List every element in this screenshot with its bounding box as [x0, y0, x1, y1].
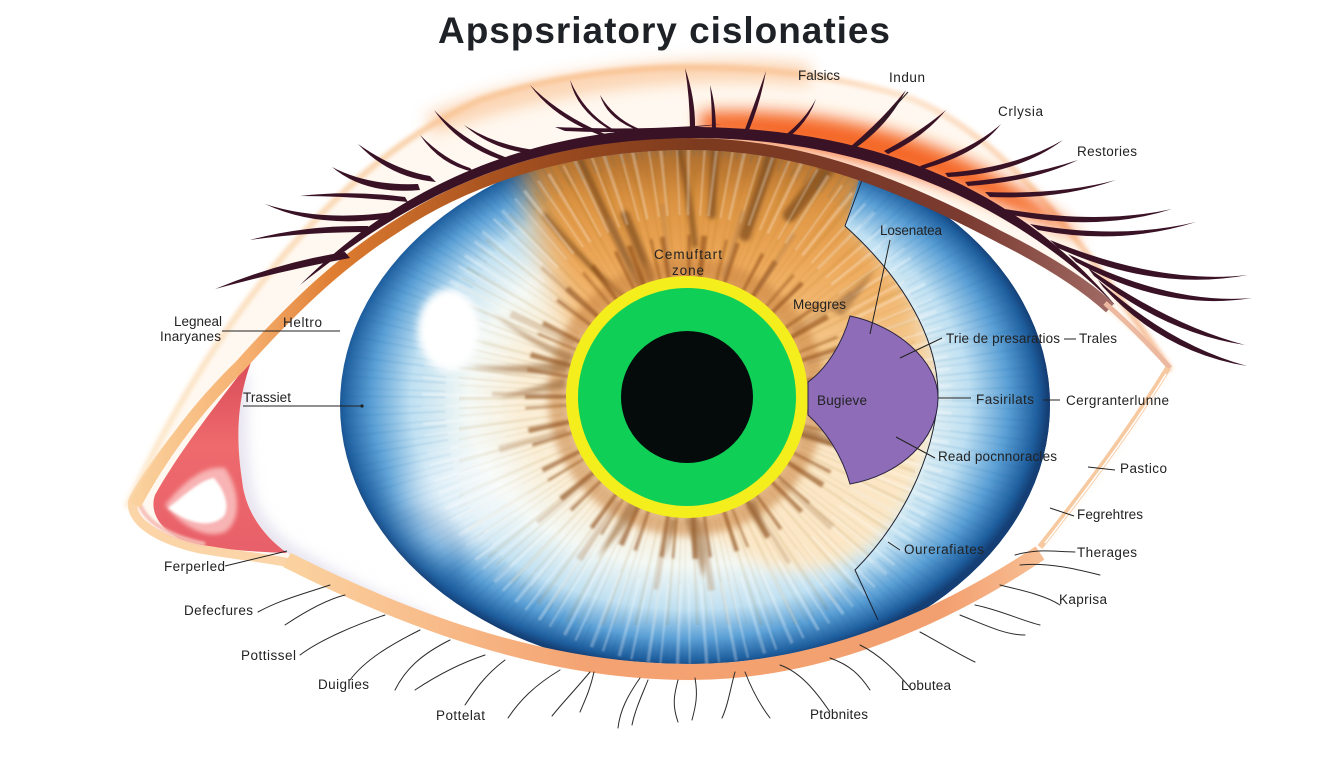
purple sector: [808, 316, 938, 484]
pupil: [621, 331, 753, 463]
labels: Pottelat: [436, 708, 485, 723]
leader lines: [222, 92, 1115, 566]
sclera: [237, 150, 1168, 664]
labels: Indun: [889, 70, 925, 85]
iris base gradient: [330, 130, 1060, 680]
upper eyelashes: [215, 68, 1252, 366]
brown halo around ring: [559, 269, 815, 525]
soft light patch lower left: [405, 450, 515, 550]
labels: Trassiet: [243, 390, 291, 405]
labels: Restories: [1077, 144, 1137, 159]
orange upper iris wedge: [504, 150, 937, 385]
labels: Defecfures: [184, 603, 253, 618]
white bottom fibres: [462, 175, 912, 625]
cream sector border: [845, 180, 938, 620]
labels: Fegrehtres: [1077, 507, 1143, 522]
iris: [340, 150, 1050, 664]
blue outer fibres: [374, 150, 1005, 653]
corner peach band: [132, 342, 305, 566]
labels: Ourerafiates: [904, 542, 984, 557]
labels: Ferperled: [164, 559, 225, 574]
labels: Ptobnites: [810, 707, 868, 722]
title: Apspsriatory cislonaties: [438, 10, 890, 51]
labels: Losenatea: [880, 223, 942, 238]
labels: Lobutea: [901, 678, 951, 693]
labels: Heltro: [283, 315, 322, 330]
lower dark blue blotch left: [400, 518, 457, 610]
lower lid: [287, 553, 1040, 672]
labels: Crlysia: [998, 104, 1043, 119]
labels: Legneal: [174, 314, 222, 329]
blue sector right of the boundary: [846, 180, 1050, 608]
orange glow above lid: [700, 111, 1085, 240]
upper lid dark line: [300, 127, 1115, 305]
labels: Pottissel: [241, 648, 296, 663]
labels: Falsics: [798, 68, 840, 83]
right lower lid inner highlight: [1045, 374, 1166, 543]
labels: Trales: [1079, 331, 1117, 346]
yellow ring: [566, 276, 808, 518]
sclera shading: [237, 372, 430, 625]
labels: [160, 68, 1169, 723]
labels: Fasirilats: [976, 392, 1034, 407]
inner corner pale line: [140, 505, 205, 544]
cream inner region on right: [716, 311, 937, 577]
labels: Kaprisa: [1059, 592, 1107, 607]
outer eyelid band: [127, 67, 1170, 507]
labels: Read pocnnoracles: [938, 449, 1057, 464]
labels: Duiglies: [318, 677, 369, 692]
labels: Therages: [1077, 545, 1137, 560]
fine orange fibres: [497, 207, 877, 587]
larger brown spikes: [467, 270, 880, 578]
right lower lid: [1040, 368, 1168, 547]
labels: Cemuftart: [654, 247, 722, 262]
labels: Meggres: [793, 297, 846, 312]
lower eyelashes: [258, 551, 1100, 728]
highlight on iris: [418, 289, 480, 371]
labels: Bugieve: [817, 393, 867, 408]
brown radial fibres: [527, 237, 847, 557]
lid tail to outer corner: [1105, 303, 1170, 368]
labels: zone: [672, 263, 704, 278]
green ring: [578, 288, 796, 506]
labels: Trie de presaratios: [946, 331, 1060, 346]
pupil rings: [566, 276, 808, 518]
skin area around the eye: [127, 67, 1170, 680]
dark streaks in orange wedge: [545, 150, 830, 300]
labels: Cergranterlunne: [1066, 393, 1169, 408]
upper lid brown band: [135, 144, 1110, 505]
leader end dot: [360, 404, 364, 408]
caruncle inner corner: [153, 357, 287, 553]
labels: Pastico: [1120, 461, 1167, 476]
labels: Inaryanes: [160, 329, 221, 344]
